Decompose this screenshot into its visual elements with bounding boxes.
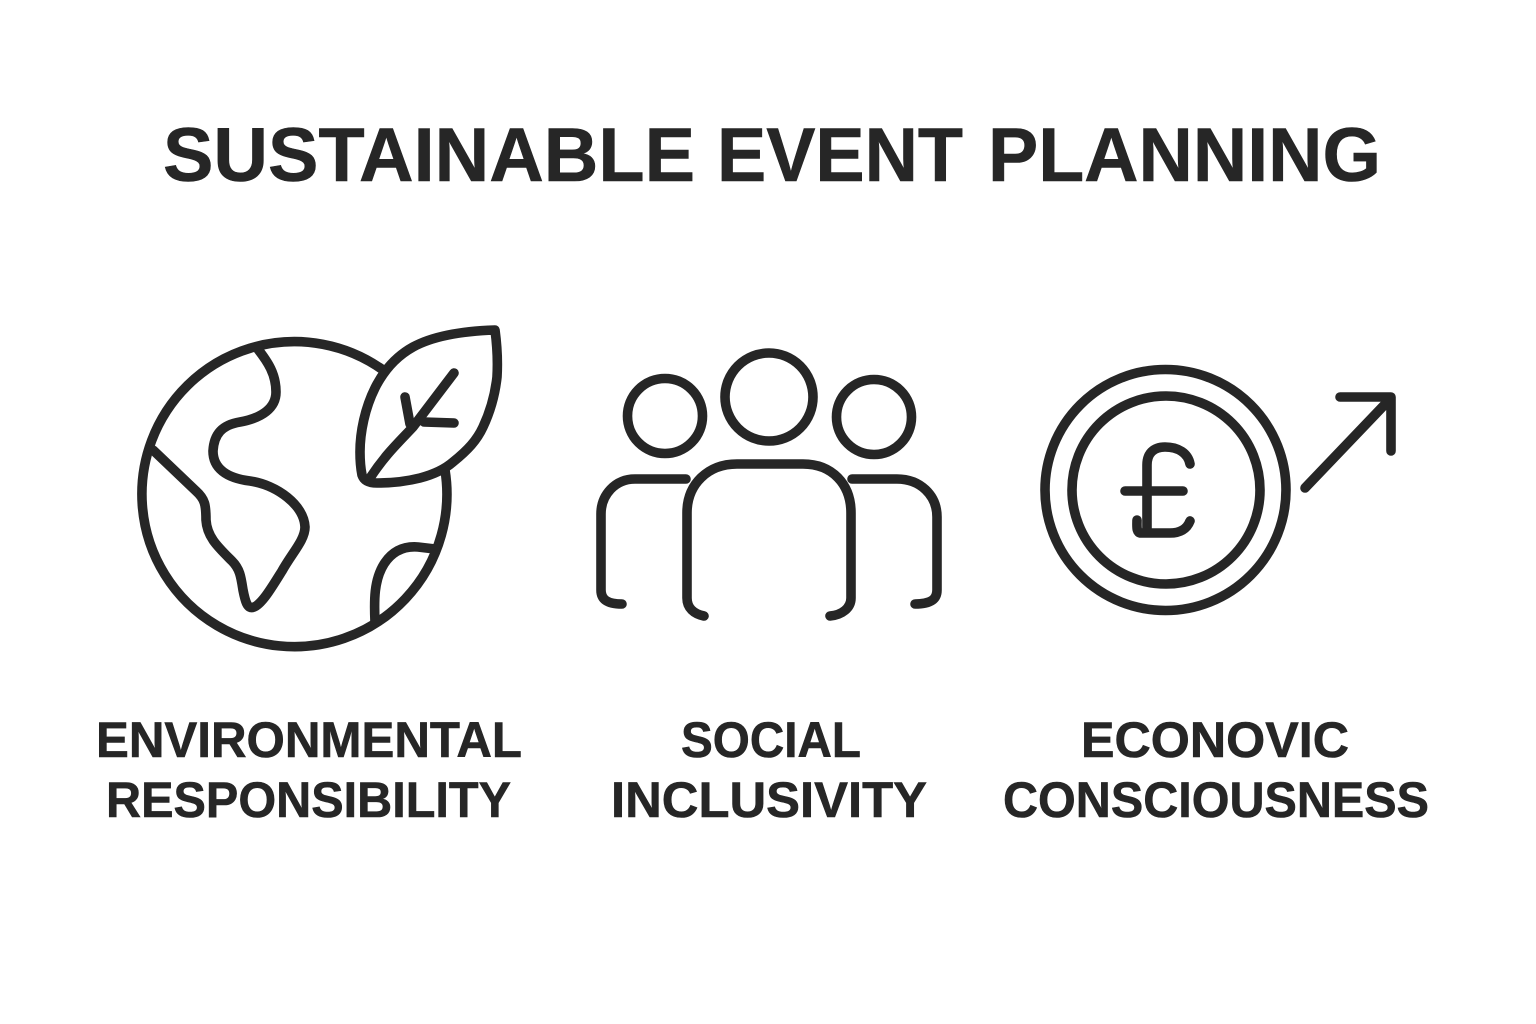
head: centre <box>725 353 813 441</box>
leaf veins <box>370 373 454 478</box>
globe outline <box>142 342 447 647</box>
label: environmental responsibility: ENVIRONMENTAL <box>96 712 522 768</box>
label: environmental responsibility: RESPONSIBILITY <box>106 772 511 828</box>
coin outer ring <box>1045 370 1286 610</box>
label: social inclusivity: INCLUSIVITY <box>611 772 927 828</box>
leaf outline <box>360 330 497 483</box>
head: left <box>628 378 702 454</box>
title <box>163 113 1381 198</box>
body: centre <box>687 464 851 616</box>
label: environmental responsibility <box>96 712 522 828</box>
label: social inclusivity <box>611 712 927 828</box>
icon: pound coin with rising arrow <box>1045 370 1391 610</box>
icon: group of people <box>601 353 937 616</box>
title: EVENT <box>717 113 963 198</box>
continent: central landmass <box>153 348 305 608</box>
body: right <box>852 479 937 604</box>
head: right <box>836 380 912 454</box>
icon: globe with leaf <box>142 330 497 647</box>
title: SUSTAINABLE <box>163 113 695 198</box>
continent: lower right <box>375 547 435 622</box>
label: social inclusivity: SOCIAL <box>681 712 861 768</box>
pound sign <box>1125 447 1190 533</box>
label: economic consciousness <box>1003 712 1429 828</box>
coin inner ring <box>1072 396 1260 584</box>
arrow <box>1305 397 1391 488</box>
title: PLANNING <box>988 113 1381 198</box>
body: left <box>601 479 686 604</box>
label: economic consciousness: ECONOVIC <box>1081 712 1349 768</box>
label: economic consciousness: CONSCIOUSNESS <box>1003 772 1429 828</box>
